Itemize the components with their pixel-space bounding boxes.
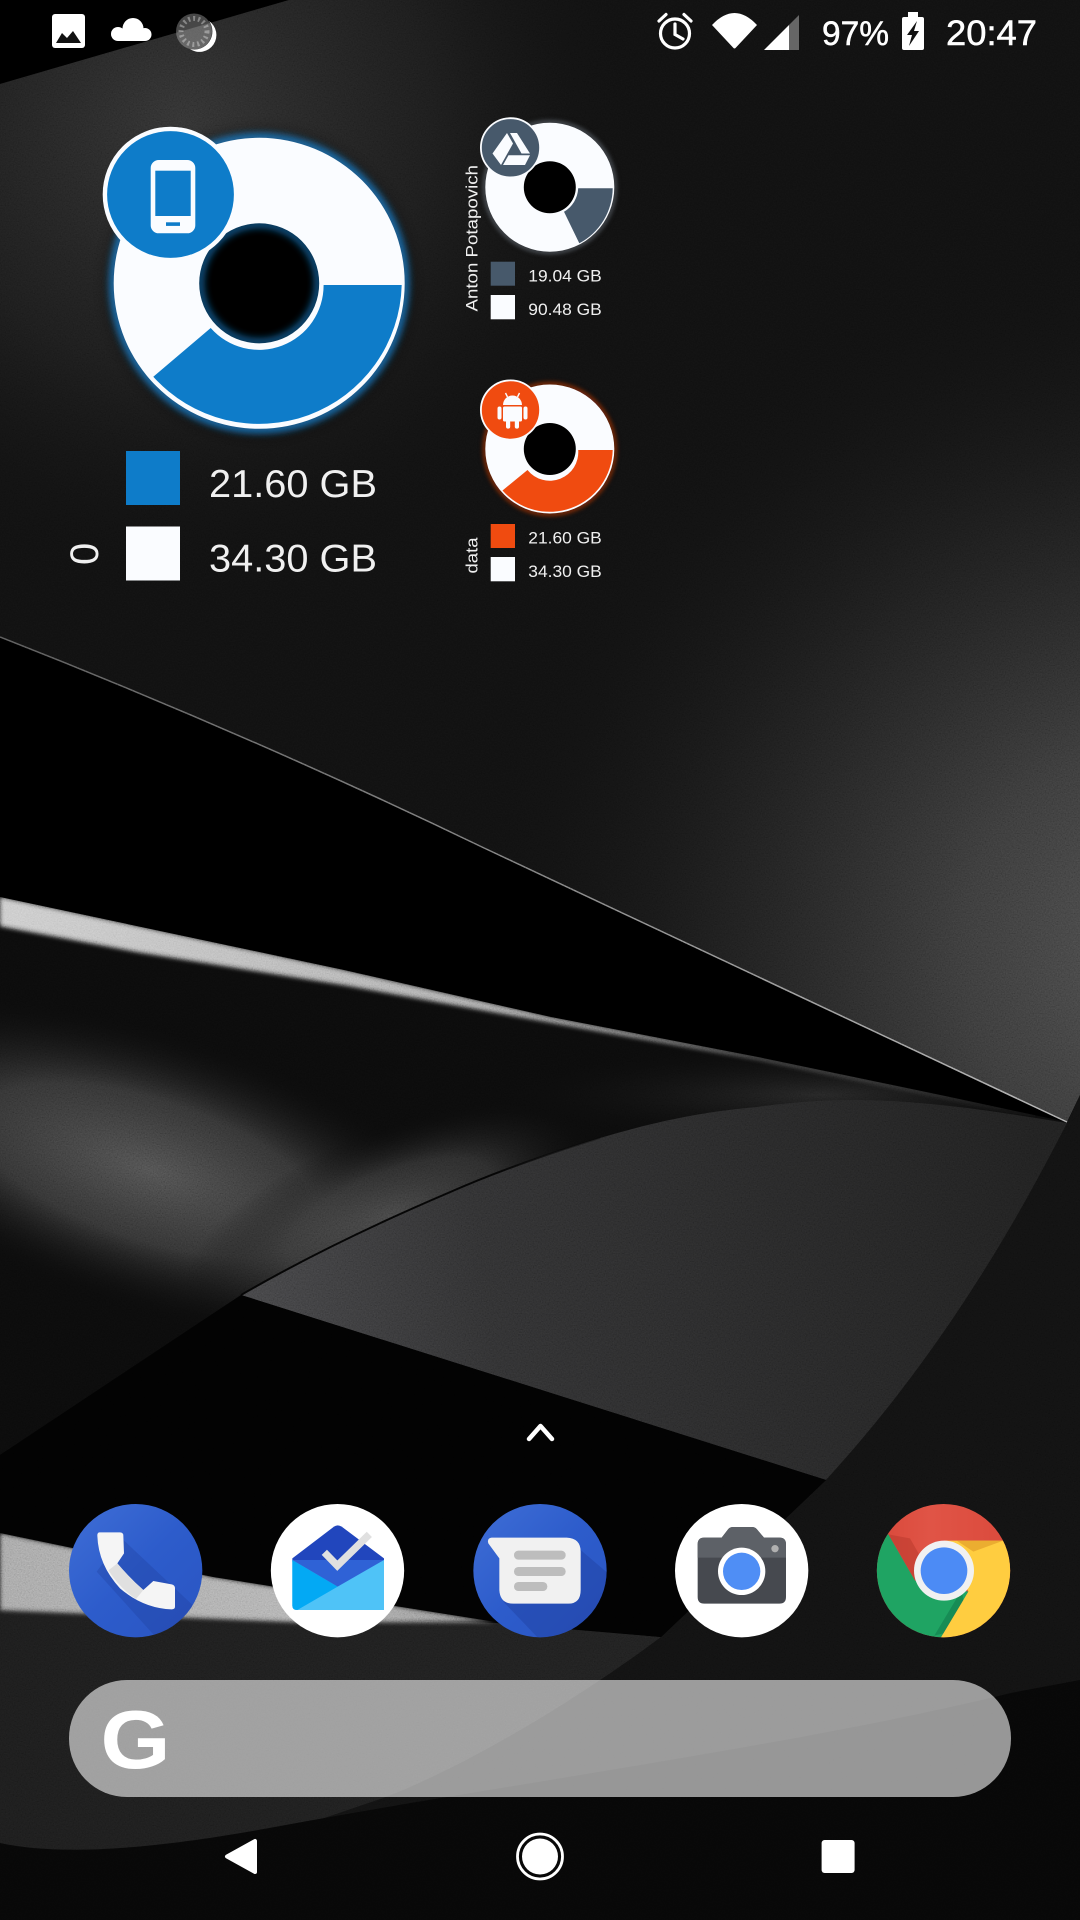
legend: used xyxy=(491,262,602,286)
icon: app drawer caret xyxy=(529,1426,552,1439)
legend: free xyxy=(491,295,602,319)
legend: free: 34.30 GB xyxy=(209,538,377,580)
legend: used xyxy=(126,451,377,506)
legend: used: 21.60 GB xyxy=(209,463,377,506)
icon: Drive badge xyxy=(481,118,540,177)
clock: 20:47 xyxy=(946,14,1037,53)
legend: free: 90.48 GB xyxy=(528,301,602,319)
icon: phone badge xyxy=(105,129,236,260)
rotated label: 0: 0 xyxy=(63,543,107,565)
dock: app icons xyxy=(69,1504,1027,1645)
search bar xyxy=(69,1680,1011,1797)
donut chart: 19.04 GB of 109.52 GB xyxy=(483,120,617,254)
icon: alarm clock xyxy=(659,14,691,48)
rotated label: data: data xyxy=(463,537,482,574)
status bar xyxy=(52,12,1037,53)
donut chart: 21.60 GB of 55.90 GB xyxy=(109,133,409,433)
rotated label: account name: Anton Potapovich xyxy=(463,165,482,312)
icon: Android badge xyxy=(481,380,540,440)
icon: phone app xyxy=(69,1504,207,1642)
icon: wifi signal xyxy=(712,13,757,48)
icon: Inbox app xyxy=(271,1504,404,1637)
icon: Messages app xyxy=(473,1504,610,1642)
icon: Camera app xyxy=(675,1504,808,1637)
icon: home xyxy=(518,1834,562,1879)
legend: free xyxy=(126,526,377,580)
legend: free xyxy=(491,557,602,581)
logo: Google G: G xyxy=(100,1693,170,1786)
icon: charging battery xyxy=(902,12,924,50)
icon: cellular signal xyxy=(764,15,799,50)
widget: internal storage donut xyxy=(63,129,409,580)
icon: Chrome app xyxy=(876,1504,1010,1638)
legend: free: 34.30 GB xyxy=(528,563,602,581)
legend: used xyxy=(491,524,602,548)
icon: recents xyxy=(822,1840,855,1873)
legend: used: 21.60 GB xyxy=(528,530,602,548)
navigation bar xyxy=(227,1834,855,1879)
widget: data partition donut xyxy=(463,380,617,581)
icon: loading spinner xyxy=(176,14,216,52)
donut chart: 21.60 GB of 55.90 GB xyxy=(483,382,617,516)
icon: cloud xyxy=(111,18,152,41)
icon: image notification xyxy=(52,14,85,48)
legend: used: 19.04 GB xyxy=(528,268,602,286)
icon: back xyxy=(227,1841,255,1872)
widget: Google Drive donut xyxy=(463,118,617,319)
battery percentage: 97% xyxy=(822,15,889,53)
